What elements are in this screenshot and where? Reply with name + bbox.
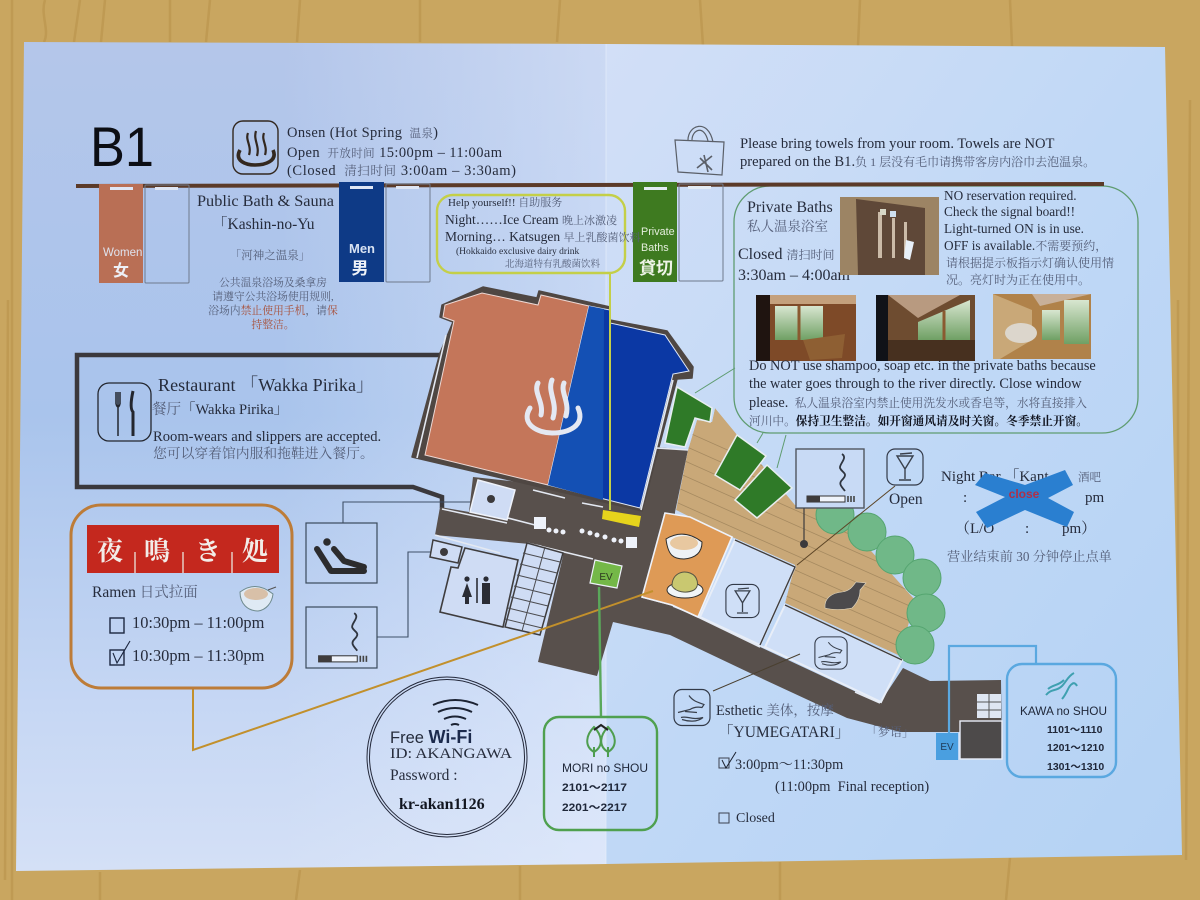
public bath text: 持整洁。 xyxy=(251,317,295,331)
ramen banner: 夜 xyxy=(97,537,123,566)
public bath text: 请遵守公共浴场使用规则, xyxy=(212,289,334,303)
public bath text xyxy=(197,191,338,331)
elevator: mori wing: EV xyxy=(599,572,613,583)
towel notice xyxy=(740,136,1095,170)
private baths title xyxy=(738,199,851,284)
corridors xyxy=(435,447,1002,759)
esthetic text xyxy=(716,702,929,826)
esthetic text: Closed xyxy=(736,811,775,826)
icon: bar open: Open xyxy=(889,491,923,508)
esthetic text: 3:00pm～11:30pm xyxy=(735,757,843,773)
ramen time options: 10:30pm – 11:30pm xyxy=(132,646,265,665)
wifi badge: kr-akan1126 xyxy=(399,796,485,813)
noren: men: 男 xyxy=(352,259,368,278)
noren: men blank xyxy=(386,184,430,282)
private baths title: Closed 清扫时间 xyxy=(738,246,834,263)
hot spring building outline xyxy=(412,287,693,511)
panel: help yourself: Morning… Katsugen 早上乳酸菌饮料 xyxy=(445,229,640,244)
smoking area marker xyxy=(796,449,864,548)
private baths title: 3:30am – 4:00am xyxy=(738,267,851,284)
panel: help yourself xyxy=(437,195,640,273)
bar room xyxy=(700,540,795,645)
noren: women blank xyxy=(145,185,189,283)
panel: kawa no shou xyxy=(1007,664,1116,777)
yellow entrance mat xyxy=(602,510,641,527)
private baths instructions: OFF is available.不需要预约， xyxy=(944,238,1107,253)
wifi badge xyxy=(367,677,527,837)
onsen hours text xyxy=(287,125,516,179)
panel: ramen: Ramen 日式拉面 xyxy=(92,584,198,601)
connector: esthetic xyxy=(713,654,800,691)
panel: ramen xyxy=(71,505,292,688)
wall lines xyxy=(417,335,880,703)
panel: mori no shou: MORI no SHOU xyxy=(562,761,648,775)
night bar text: Night Bar 「Kant xyxy=(941,468,1049,485)
esthetic text: (11:00pm Final reception) xyxy=(775,779,929,795)
restaurant text: Restaurant 「Wakka Pirika」 xyxy=(158,375,374,395)
green rooms xyxy=(665,387,792,518)
wifi badge: Free Wi-Fi xyxy=(390,727,472,747)
private baths rules: the water goes through to the river directly. Close window xyxy=(749,376,1082,392)
night bar text: pm xyxy=(1085,490,1104,506)
wifi badge: ID: AKANGAWA xyxy=(390,746,512,762)
shrubs xyxy=(816,496,945,664)
public bath text: 「Kashin-no-Yu xyxy=(212,215,315,233)
towel notice: prepared on the B1.负 1 层没有毛巾请携带客房内浴巾去泡温泉。 xyxy=(740,154,1095,170)
connector: help yourself xyxy=(609,273,611,510)
private baths instructions: NO reservation required. xyxy=(944,188,1077,203)
noren: private baths: Baths xyxy=(641,242,669,254)
panel: restaurant xyxy=(77,355,442,508)
ramen banner: き xyxy=(195,537,221,566)
night bar text: pm） xyxy=(1062,520,1096,537)
seal statue xyxy=(825,582,866,610)
photo: bath room two xyxy=(876,295,975,361)
public bath text: 公共温泉浴场及桑拿房 xyxy=(219,275,327,289)
private baths instructions: 况。亮灯时为正在使用中。 xyxy=(946,272,1090,287)
closed cross mark: close xyxy=(1009,487,1040,501)
men's bath xyxy=(548,306,689,508)
night bar text: 酒吧 xyxy=(1078,471,1101,484)
panel: kawa no shou: 1201～1210 xyxy=(1047,742,1104,754)
restaurant room xyxy=(642,513,732,617)
noren: men: Men xyxy=(349,241,375,256)
noren: women xyxy=(99,184,143,283)
onsen hours text: Onsen (Hot Spring 温泉) xyxy=(287,125,438,141)
night bar text: 营业结束前 30 分钟停止点单 xyxy=(947,548,1112,564)
toilets xyxy=(440,548,518,627)
connector: ramen to restaurant xyxy=(193,591,653,750)
elevator: mori wing xyxy=(590,560,622,588)
noren: men xyxy=(339,182,384,282)
private baths rules xyxy=(749,358,1096,428)
noren: private blank xyxy=(679,184,723,281)
icon: esthetic xyxy=(674,690,710,726)
private baths title: 私人温泉浴室 xyxy=(747,219,828,234)
hanging rod xyxy=(76,184,1104,186)
women's bath xyxy=(425,293,589,485)
photo: signal board xyxy=(840,197,939,275)
noren: private baths: 貸切 xyxy=(639,258,673,278)
restaurant text: Room-wears and slippers are accepted. xyxy=(153,429,381,445)
esthetic text: 「梦语」 xyxy=(866,724,914,739)
kawa wing rooms xyxy=(960,694,1002,759)
connector: mori wing xyxy=(599,587,601,717)
floor plan xyxy=(412,287,1002,759)
icon: massage chair xyxy=(306,523,377,583)
connector: kawa wing xyxy=(949,646,1036,733)
night bar text xyxy=(941,468,1112,564)
photo: bath room one xyxy=(756,295,856,361)
panel: private baths xyxy=(734,186,1138,433)
panel: help yourself: (Hokkaido exclusive dairy drink xyxy=(456,246,579,257)
private baths instructions: 请根据提示板指示灯确认使用情 xyxy=(946,255,1114,270)
panel: mori no shou: 2201～2217 xyxy=(562,802,627,814)
esthetic text: 「YUMEGATARI」 xyxy=(718,723,850,741)
public bath text: 浴场内禁止使用手机，请保 xyxy=(208,303,338,317)
restaurant text: 餐厅「Wakka Pirika」 xyxy=(152,400,288,418)
wifi badge: Password : xyxy=(390,767,458,784)
icon: onsen mark xyxy=(527,380,580,433)
night bar text: （L/O xyxy=(955,520,994,537)
noren: women: Women xyxy=(103,247,142,259)
massage room xyxy=(470,480,515,520)
ramen banner xyxy=(87,525,279,573)
photo: bath room three xyxy=(993,294,1091,359)
restaurant text: 您可以穿着馆内服和拖鞋进入餐厅。 xyxy=(153,445,374,461)
towel notice: Please bring towels from your room. Towels are NOT xyxy=(740,136,1055,152)
private baths rules: 河川中。保持卫生整洁。如开窗通风请及时关窗。冬季禁止开窗。 xyxy=(749,414,1088,428)
elevator: kawa wing: EV xyxy=(940,742,954,753)
onsen hours text: Open 开放时间 15:00pm – 11:00am xyxy=(287,145,503,161)
panel: help yourself: 北海道特有乳酸菌饮料 xyxy=(505,258,601,270)
icon: bar open xyxy=(887,449,923,508)
panel: mori no shou: 2101～2117 xyxy=(562,782,627,794)
icon: river waves xyxy=(1046,673,1077,699)
night bar text: : xyxy=(1025,521,1029,537)
panel: help yourself: Night……Ice Cream 晚上冰激凌 xyxy=(445,212,617,227)
outdoor deck xyxy=(676,408,914,656)
floor label B1: B1 xyxy=(90,115,154,178)
connector: private baths callouts xyxy=(695,368,786,468)
public bath text: 「河神之温泉」 xyxy=(230,248,310,262)
panel: help yourself: Help yourself!! 自助服务 xyxy=(448,195,562,209)
stairs xyxy=(505,543,563,635)
night bar text: : xyxy=(963,490,967,506)
smoking room small xyxy=(430,540,462,563)
closed cross mark xyxy=(975,470,1074,528)
icon: ramen bowl xyxy=(240,586,276,611)
esthetic text: Esthetic 美体，按摩 xyxy=(716,702,834,719)
private baths instructions: Light-turned ON is in use. xyxy=(944,221,1084,236)
private baths title: Private Baths xyxy=(747,199,833,216)
panel: kawa no shou: 1301～1310 xyxy=(1047,761,1104,773)
esthetic room xyxy=(765,605,902,702)
noren: private baths xyxy=(633,182,677,282)
icon: cutlery xyxy=(98,383,151,441)
private baths instructions: Check the signal board!! xyxy=(944,204,1075,219)
panel: kawa no shou: 1101～1110 xyxy=(1047,724,1103,736)
ramen time options: 10:30pm – 11:00pm xyxy=(132,613,265,632)
connector: massage to room xyxy=(343,502,491,523)
ramen banner: 処 xyxy=(242,537,268,566)
ramen time options xyxy=(110,613,265,665)
private baths rules: please. 私人温泉浴室内禁止使用洗发水或香皂等，水将直接排入 xyxy=(749,395,1087,411)
icon: wifi xyxy=(433,700,478,725)
icon: towel bag xyxy=(675,126,724,175)
restaurant text xyxy=(152,375,381,461)
ramen banner: 鳴 xyxy=(144,537,170,566)
panel: kawa no shou: KAWA no SHOU xyxy=(1020,704,1107,718)
white dots xyxy=(534,517,637,548)
onsen hours text: (Closed 清扫时间 3:00am – 3:30am) xyxy=(287,163,516,179)
private baths instructions xyxy=(944,188,1114,287)
public bath text: Public Bath & Sauna xyxy=(197,191,334,210)
noren: private baths: Private xyxy=(641,226,675,238)
icon: trees xyxy=(587,725,615,757)
private baths rules: Do NOT use shampoo, soap etc. in the private baths because xyxy=(749,358,1096,374)
icon: onsen xyxy=(233,121,278,174)
noren: women: 女 xyxy=(113,261,129,280)
connector: deck to bar xyxy=(797,486,895,565)
elevator: kawa wing xyxy=(936,733,958,760)
panel: mori no shou xyxy=(544,717,657,830)
icon: smoking xyxy=(306,607,377,668)
connector: smoking to room xyxy=(377,552,444,637)
